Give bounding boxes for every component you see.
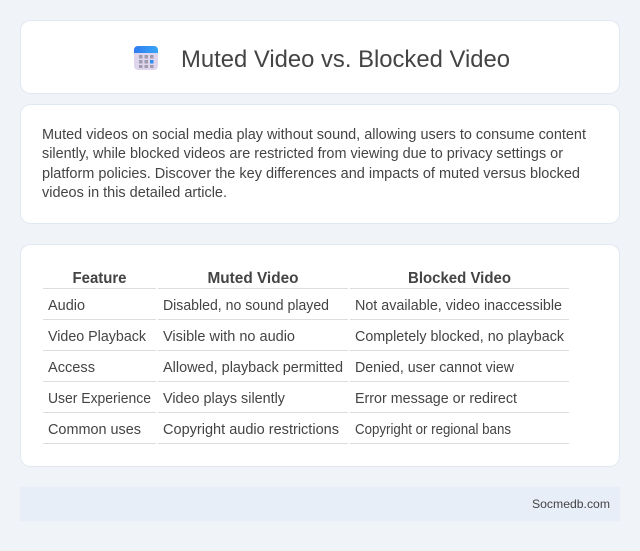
text block: introduction paragraph <box>42 127 586 201</box>
table row: Audio <box>48 298 562 314</box>
table row: Video Playback: Video Playback <box>48 329 147 345</box>
text block: introduction paragraph: platform policies. Discover the key differences and impacts of muted versus blocked <box>42 166 580 182</box>
table row: Access: Allowed, playback permitted <box>163 360 343 376</box>
table row: Video Playback: Visible with no audio <box>163 329 295 345</box>
table header <box>72 270 511 287</box>
table row: User Experience: User Experience <box>48 391 151 407</box>
table header: Feature <box>72 270 127 287</box>
table row: User Experience: Video plays silently <box>163 391 286 407</box>
table row: User Experience <box>48 391 517 407</box>
table row: Common uses: Common uses <box>48 422 141 438</box>
panel: comparison table <box>20 244 620 466</box>
title: Muted Video vs. Blocked Video <box>181 46 510 73</box>
panel: title header <box>20 20 620 94</box>
table row: User Experience: Error message or redirect <box>355 391 517 407</box>
table row: Video Playback <box>48 329 565 345</box>
table row: Audio: Disabled, no sound played <box>163 298 329 314</box>
footer text: Socmedb.com <box>532 497 610 511</box>
text block: introduction paragraph: videos in this detailed article. <box>42 185 227 201</box>
table row: Access <box>48 360 515 376</box>
table row: Audio: Not available, video inaccessible <box>355 298 562 314</box>
text block: introduction paragraph: Muted videos on social media play without sound, allowing users to consume content <box>42 127 586 143</box>
table row: Video Playback: Completely blocked, no playback <box>355 329 565 345</box>
table row: Common uses <box>48 422 511 438</box>
table row: Audio: Audio <box>48 298 85 314</box>
panel: introduction <box>20 104 620 224</box>
table row: Access: Denied, user cannot view <box>355 360 515 376</box>
footer bar <box>20 487 620 521</box>
table row: Common uses: Copyright or regional bans <box>355 422 511 438</box>
table row: Access: Access <box>48 360 95 376</box>
icon: calendar <box>134 46 158 70</box>
text block: introduction paragraph: silently, while blocked videos are restricted from viewing due to privacy settings or <box>42 146 563 162</box>
table header: Blocked Video <box>408 270 511 287</box>
table row: Common uses: Copyright audio restrictions <box>163 422 339 438</box>
table header: Muted Video <box>208 270 298 287</box>
